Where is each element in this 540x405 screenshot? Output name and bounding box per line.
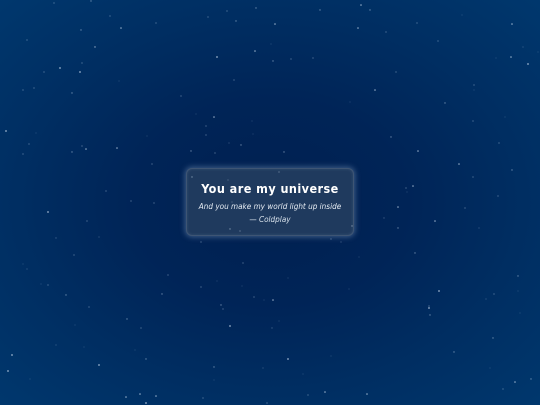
attribution: — Coldplay xyxy=(249,214,291,224)
quote card xyxy=(186,168,354,236)
title: You are my universe xyxy=(201,181,339,196)
quote line: And you make my world light up inside xyxy=(199,201,341,211)
card stars xyxy=(191,171,353,232)
